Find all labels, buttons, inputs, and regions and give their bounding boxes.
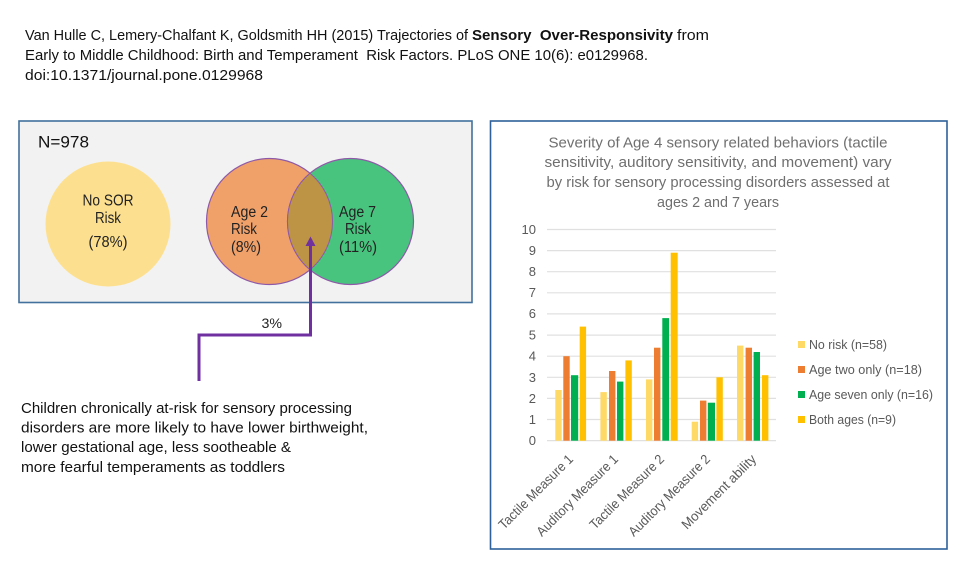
arrow: overlap to callout — [199, 236, 316, 381]
y axis labels: 9 — [529, 243, 536, 258]
circle: age 2 risk — [206, 158, 332, 284]
callout text: Children chronically at-risk for sensory processing — [21, 400, 352, 417]
callout text: more fearful temperaments as toddlers — [21, 459, 285, 476]
circle: age 7 risk: Age 7 — [339, 204, 376, 221]
callout text: lower gestational age, less sootheable & — [21, 439, 291, 456]
y axis labels: 1 — [529, 412, 536, 427]
overlap percentage label: 3% — [262, 315, 282, 331]
y axis labels: 10 — [522, 222, 536, 237]
x axis labels: Auditory Measure 1 — [533, 452, 621, 539]
chart legend — [798, 338, 933, 427]
circle: no SOR risk: (78%) — [88, 234, 128, 251]
y axis labels: 0 — [529, 433, 536, 448]
circle: age 2 risk: Risk — [231, 221, 257, 238]
circle: age 7 risk: (11%) — [339, 239, 377, 256]
panel: bar chart — [490, 121, 947, 549]
panel: venn diagram — [19, 121, 472, 302]
venn overlap — [287, 173, 333, 270]
citation heading: Sensory Over-Responsivity — [472, 27, 674, 44]
circle: no SOR risk: Risk — [95, 210, 121, 227]
circle: no SOR risk: No SOR — [82, 192, 134, 210]
y axis labels: 5 — [529, 328, 536, 342]
sample size label: N=978 — [38, 132, 89, 152]
citation heading: from — [677, 27, 709, 44]
y axis labels — [522, 222, 536, 448]
chart title: ages 2 and 7 years — [657, 194, 779, 211]
y axis labels: 8 — [529, 264, 536, 279]
chart legend: No risk (n=58) — [809, 338, 887, 352]
bars: no risk — [555, 346, 743, 441]
citation heading: Early to Middle Childhood: Birth and Temperament Risk Factors. PLoS ONE 10(6): e0129968. — [25, 47, 648, 64]
circle: age 7 risk — [288, 158, 414, 284]
chart title: by risk for sensory processing disorders assessed at — [546, 174, 890, 191]
y axis labels: 2 — [529, 391, 536, 406]
y axis labels: 3 — [529, 370, 536, 385]
x axis labels: Movement ability — [679, 451, 759, 532]
chart title — [544, 134, 892, 211]
chart legend: Both ages (n=9) — [809, 413, 896, 427]
x axis labels: Tactile Measure 2 — [587, 452, 667, 532]
bars: age seven only — [571, 318, 760, 441]
circle: age 2 risk: (8%) — [231, 239, 261, 256]
bars: age two only — [563, 348, 752, 441]
chart legend: Age seven only (n=16) — [809, 388, 933, 402]
y axis labels: 6 — [529, 306, 536, 321]
chart title: sensitivity, auditory sensitivity, and movement) vary — [544, 154, 892, 171]
bars: both ages — [580, 253, 768, 441]
citation heading: doi:10.1371/journal.pone.0129968 — [25, 67, 263, 84]
citation heading: Van Hulle C, Lemery-Chalfant K, Goldsmith HH (2015) Trajectories of — [25, 27, 469, 44]
y axis labels: 7 — [529, 285, 536, 300]
x axis labels: Tactile Measure 1 — [496, 452, 576, 532]
chart title: Severity of Age 4 sensory related behaviors (tactile — [548, 134, 888, 152]
chart legend: Age two only (n=18) — [809, 363, 922, 377]
circle: age 7 risk: Risk — [345, 221, 371, 238]
callout text — [21, 400, 368, 476]
x axis labels: Auditory Measure 2 — [625, 452, 713, 539]
citation heading — [25, 27, 709, 84]
gridlines — [547, 230, 776, 441]
x axis labels — [496, 451, 759, 539]
y axis labels: 4 — [529, 348, 536, 364]
circle: no SOR risk — [46, 162, 170, 286]
callout text: disorders are more likely to have lower birthweight, — [21, 420, 368, 436]
circle: age 2 risk: Age 2 — [231, 204, 268, 221]
